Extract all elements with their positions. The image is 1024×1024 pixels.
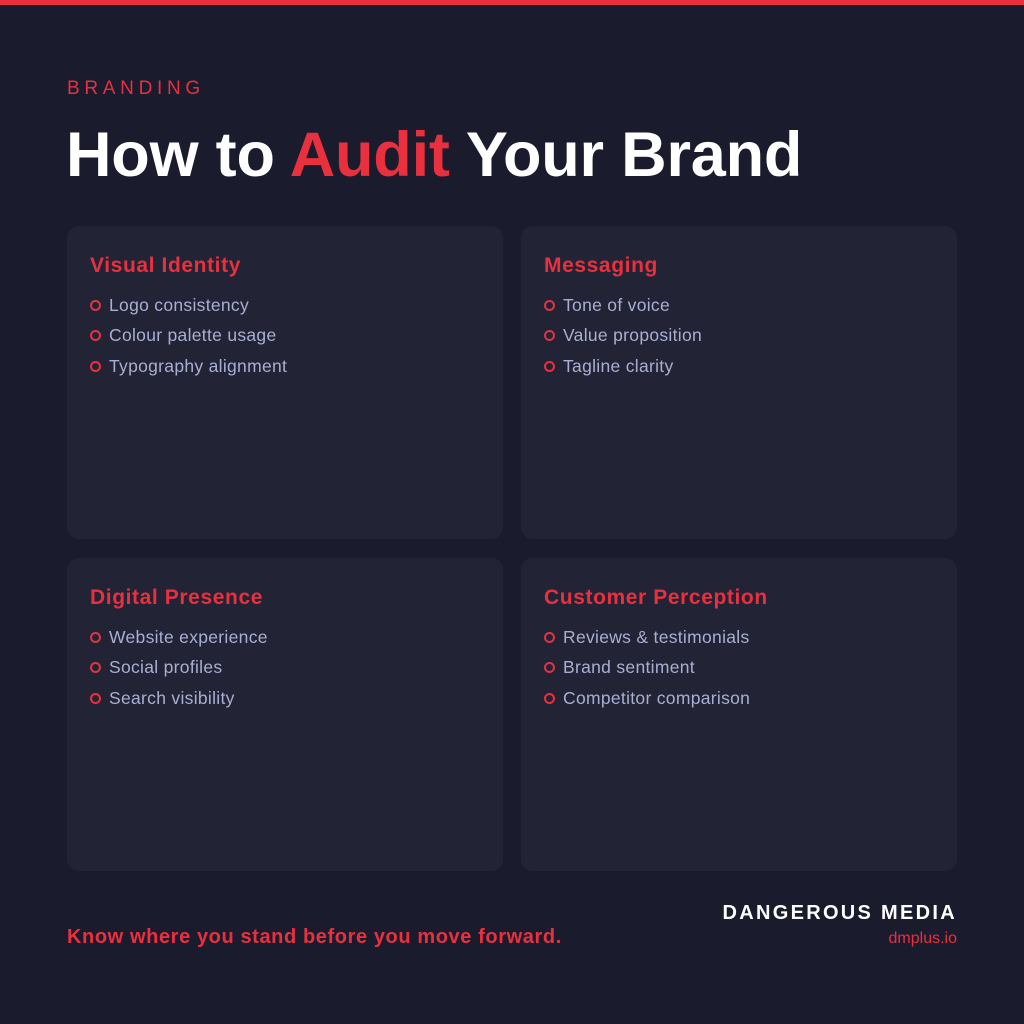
tagline: Know where you stand before you move forward. (67, 926, 562, 948)
list: Website experience (109, 627, 268, 647)
list: Social profiles (109, 657, 222, 677)
list (90, 295, 287, 376)
list: Tone of voice (563, 295, 670, 315)
panel: visual identity (67, 226, 503, 539)
heading: Digital Presence (90, 586, 263, 609)
panel: customer perception (521, 558, 957, 871)
list: Competitor comparison (563, 688, 750, 708)
heading: Messaging (544, 254, 658, 277)
list (544, 627, 750, 708)
panel: digital presence (67, 558, 503, 871)
heading: Visual Identity (90, 254, 241, 277)
list: Typography alignment (109, 356, 287, 376)
list (90, 627, 268, 708)
list: Tagline clarity (563, 356, 674, 376)
list: Colour palette usage (109, 325, 276, 345)
list: Value proposition (563, 325, 702, 345)
brand name: DANGEROUS MEDIA (722, 902, 957, 924)
list: Search visibility (109, 688, 235, 708)
heading: Customer Perception (544, 586, 768, 609)
kicker: BRANDING (67, 78, 205, 99)
list (544, 295, 702, 376)
panel: messaging (521, 226, 957, 539)
list: Brand sentiment (563, 657, 695, 677)
list: Reviews & testimonials (563, 627, 750, 647)
list: Logo consistency (109, 295, 249, 315)
title: How to Audit Your Brand (66, 120, 802, 190)
url: dmplus.io (889, 930, 957, 947)
